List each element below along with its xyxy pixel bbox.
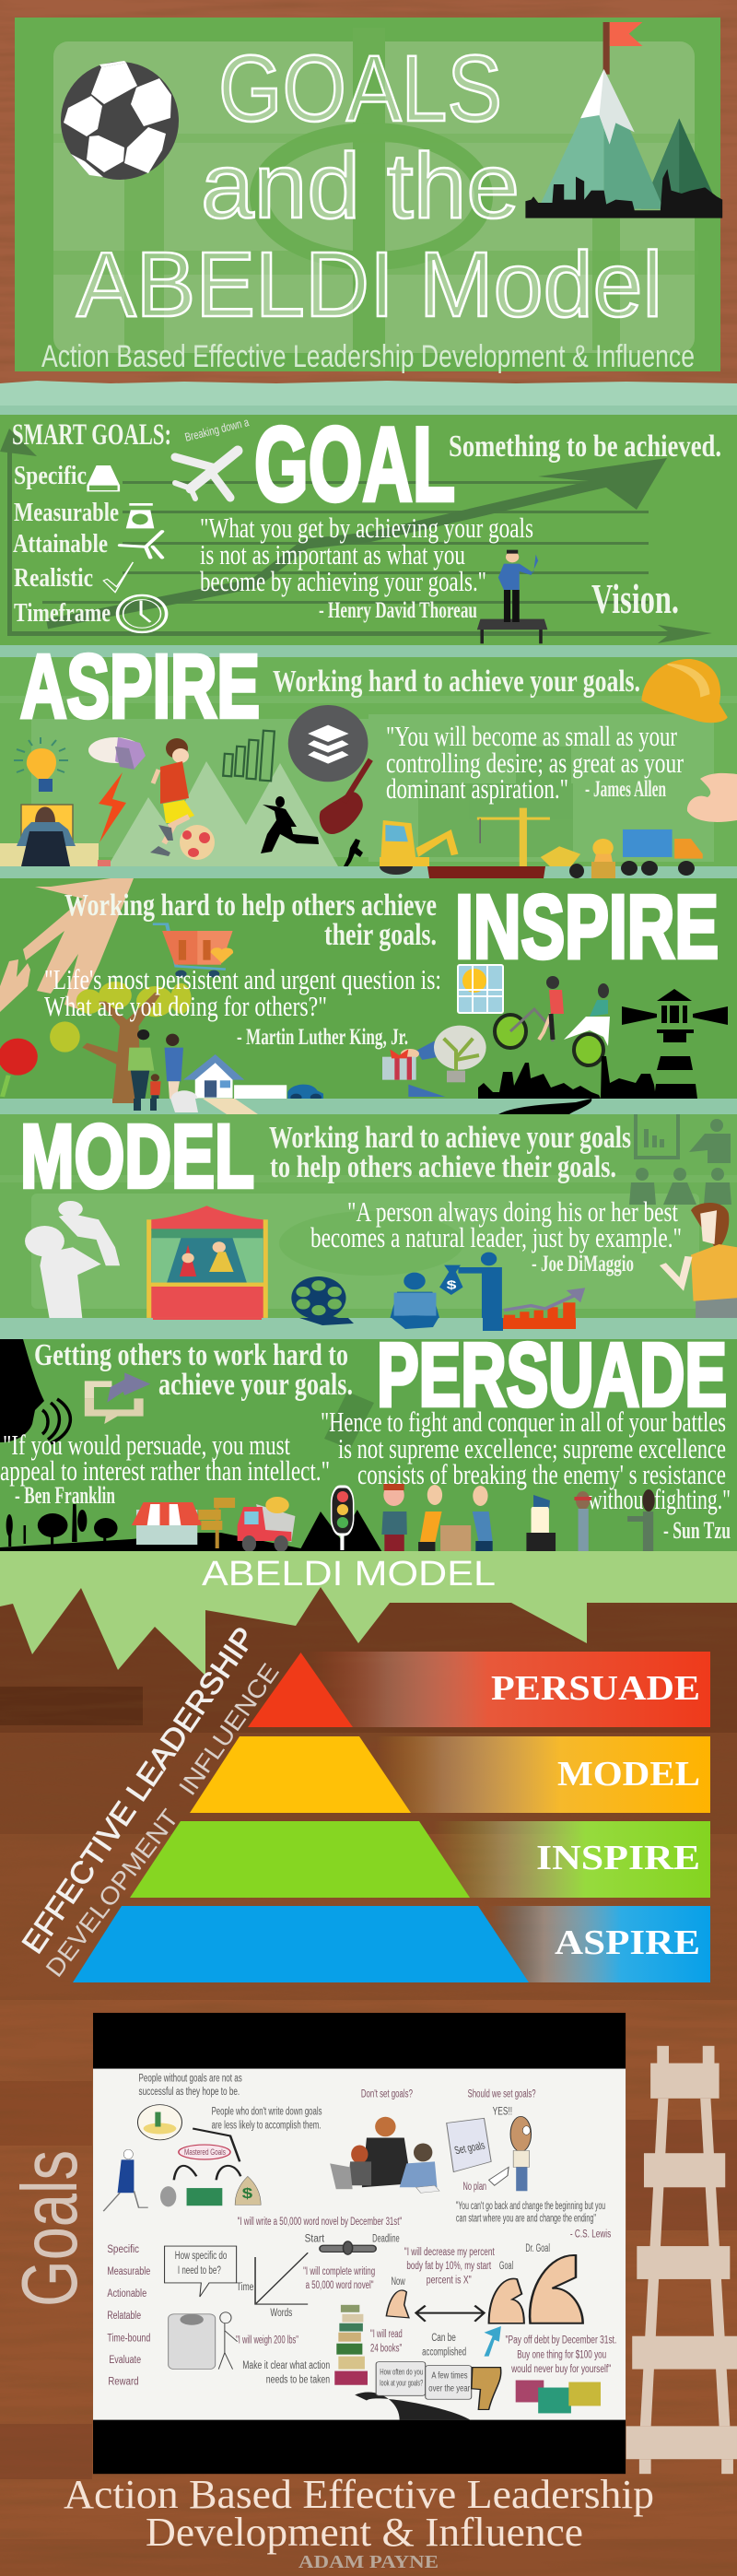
heading: MODEL: MODEL bbox=[20, 1106, 254, 1206]
pyramid tier: red bbox=[248, 1653, 353, 1727]
quote: James Allen: - James Allen bbox=[585, 777, 666, 802]
icon: soccer ball bbox=[61, 61, 179, 180]
whiteboard text: People without goals are not as bbox=[139, 2072, 242, 2084]
whiteboard text: "I will decrease my percent bbox=[404, 2246, 495, 2258]
whiteboard text: Words bbox=[270, 2306, 293, 2318]
quote: Ben Franklin: appeal to interest rather than intellect." bbox=[0, 1454, 330, 1487]
author credit: ADAM PAYNE bbox=[298, 2552, 439, 2572]
whiteboard text: Don't set goals? bbox=[361, 2088, 413, 2100]
faint building bbox=[418, 747, 573, 857]
icon: clock bbox=[118, 595, 167, 632]
quote: James Allen bbox=[386, 720, 684, 805]
icon: boy with soccer ball bbox=[150, 738, 215, 860]
vertical label: Goals: Goals bbox=[6, 2150, 94, 2307]
title text: and the: and the bbox=[201, 135, 520, 238]
trees bbox=[6, 1504, 189, 1548]
icon: window with sun bbox=[458, 965, 503, 1013]
icon: sound waves bbox=[42, 1399, 70, 1443]
quote: Thoreau: - Henry David Thoreau bbox=[319, 598, 477, 623]
sketch: road, speech bubbles and thumbs down: look at your goals? bbox=[380, 2380, 423, 2388]
icon: film reel bbox=[291, 1276, 353, 1324]
illustration: street scene bbox=[0, 1484, 655, 1552]
pyramid chart bbox=[73, 1652, 710, 1982]
whiteboard text: How specific do bbox=[175, 2250, 227, 2262]
sketch: bathroom scale and stick figure bbox=[169, 2312, 238, 2370]
label: Vision: Vision. bbox=[591, 575, 679, 622]
video panel: goals whiteboard bbox=[93, 2013, 626, 2474]
icon: gift and bulb bbox=[382, 1026, 486, 1097]
field pattern bbox=[0, 696, 737, 862]
whiteboard text: body fat by 10%, my start bbox=[406, 2260, 491, 2272]
icon: check mark bbox=[103, 562, 133, 593]
icon: shopping cart bbox=[153, 924, 233, 978]
quote: Ben Franklin: - Ben Franklin bbox=[15, 1482, 115, 1509]
icon: reaching hands bbox=[0, 878, 134, 1012]
illustration: parent and child silhouette bbox=[25, 1201, 120, 1318]
whiteboard text: I need to be? bbox=[178, 2264, 221, 2276]
soccer field pattern bbox=[53, 28, 698, 371]
panel: GOAL bbox=[0, 406, 737, 645]
whiteboard text: percent is X" bbox=[427, 2274, 472, 2286]
title text: GOALS: GOALS bbox=[218, 36, 502, 141]
icon: geometric brain bbox=[88, 737, 146, 770]
definition: Working hard to achieve your goals bbox=[269, 1121, 631, 1155]
whiteboard text: Measurable bbox=[107, 2265, 150, 2277]
quote: Thoreau bbox=[200, 512, 533, 623]
pyramid tier: green bbox=[130, 1821, 470, 1898]
teal divider bbox=[0, 1318, 737, 1339]
SMART list: Realistic bbox=[14, 564, 93, 593]
panel: INSPIRE bbox=[0, 876, 737, 1114]
illustration: puppet theater bbox=[146, 1206, 268, 1318]
whiteboard text: Start bbox=[305, 2232, 324, 2244]
icon: person with laptop and investor bbox=[390, 1253, 502, 1327]
icon: tandem bike bbox=[495, 976, 610, 1065]
footer title bbox=[64, 2472, 654, 2555]
quote: Joe DiMaggio bbox=[310, 1195, 682, 1276]
icon: hard hat bbox=[641, 659, 728, 723]
whiteboard text: Specific bbox=[107, 2243, 139, 2255]
quote: Martin Luther King: "Life's most persistent and urgent question is: bbox=[44, 963, 441, 995]
definition: achieve your goals. bbox=[158, 1368, 353, 1402]
panel: PERSUADE bbox=[0, 1324, 737, 1552]
sketch: goal arrows and money bbox=[160, 2129, 261, 2206]
quote: Martin Luther King: What are you doing for others?" bbox=[44, 990, 327, 1022]
label bar: inspire bbox=[433, 1821, 710, 1898]
footer title: Development & Influence bbox=[146, 2510, 583, 2555]
sketch: road, speech bubbles and thumbs down bbox=[355, 2362, 501, 2420]
footer title: Action Based Effective Leadership bbox=[64, 2472, 654, 2517]
icon: skyline bbox=[478, 1056, 656, 1099]
whiteboard text: "I will read bbox=[370, 2327, 403, 2340]
icon: running silhouette bbox=[261, 796, 319, 853]
label bar: inspire: INSPIRE bbox=[536, 1839, 700, 1877]
whiteboard text: successful as they hope to be. bbox=[139, 2085, 240, 2097]
label bar: model: MODEL bbox=[557, 1755, 700, 1794]
SMART list: Measurable bbox=[14, 499, 119, 527]
sketch: gift boxes bbox=[516, 2381, 601, 2413]
illustration: woman gesturing bbox=[662, 1203, 737, 1318]
whiteboard text: "I will write a 50,000 word novel by December 31st" bbox=[238, 2215, 402, 2228]
definition: their goals. bbox=[324, 918, 437, 952]
teal divider with ground objects bbox=[0, 857, 737, 878]
sketch: time-words chart bbox=[165, 2241, 376, 2304]
whiteboard text: 24 books" bbox=[370, 2342, 402, 2354]
whiteboard text: would never buy for yourself" bbox=[510, 2362, 611, 2374]
heading: ABELDI MODEL: ABELDI MODEL bbox=[202, 1555, 496, 1594]
label bar: model bbox=[376, 1736, 710, 1813]
icon: excavator and crane bbox=[380, 808, 703, 866]
label bar: aspire bbox=[488, 1906, 710, 1982]
dump truck bbox=[256, 1504, 295, 1542]
teal divider with road bbox=[0, 1099, 737, 1114]
pyramid tier: yellow bbox=[190, 1736, 411, 1813]
whiteboard text bbox=[107, 2072, 616, 2387]
whiteboard text: "Pay off debt by December 31st. bbox=[505, 2334, 616, 2346]
SMART list: Timeframe bbox=[14, 599, 111, 628]
definition bbox=[269, 1121, 631, 1184]
icon: gymnast bbox=[120, 532, 162, 558]
icon: flexed arm bbox=[687, 773, 737, 822]
quote: Thoreau: become by achieving your goals." bbox=[200, 565, 486, 597]
quote: Sun Tzu bbox=[321, 1406, 731, 1544]
label bar: persuade bbox=[306, 1652, 710, 1727]
whiteboard text: can start where you are and change the ending" bbox=[456, 2212, 596, 2224]
icon: growth chart bbox=[504, 1288, 585, 1327]
whiteboard text: Now bbox=[391, 2275, 405, 2288]
whiteboard text: "I will complete writing bbox=[303, 2265, 375, 2277]
whiteboard text: Evaluate bbox=[109, 2353, 141, 2365]
icon: light bulb bbox=[14, 737, 68, 792]
sketch: flexed arms and arrow bbox=[386, 2255, 583, 2357]
pyramid tier: blue bbox=[73, 1906, 529, 1982]
whiteboard text: a 50,000 word novel" bbox=[306, 2278, 374, 2291]
title text: ABELDI Model: ABELDI Model bbox=[76, 233, 662, 336]
quote: James Allen: dominant aspiration." bbox=[386, 772, 568, 805]
icon: lightning bolt bbox=[99, 772, 126, 842]
icon: person with laptop and investor: $ bbox=[447, 1278, 456, 1291]
label: Breaking down a: Breaking down a bbox=[183, 415, 251, 444]
sketch: stressed business people bbox=[330, 2117, 439, 2193]
whiteboard text: Time-bound bbox=[107, 2332, 150, 2344]
rotated label: INFLUENCE: INFLUENCE bbox=[173, 1658, 285, 1800]
sketch: goal arrows and money: $ bbox=[242, 2184, 252, 2202]
SMART list bbox=[13, 462, 119, 628]
definition: to help others achieve their goals. bbox=[270, 1150, 616, 1184]
icon: lighthouse bbox=[622, 989, 728, 1099]
icon: man on table bbox=[477, 550, 547, 643]
icon: flask bbox=[87, 465, 120, 491]
whiteboard text: Buy one thing for $100 you bbox=[517, 2348, 606, 2360]
whiteboard text: Make it clear what action bbox=[242, 2358, 330, 2370]
sketch: road, speech bubbles and thumbs down: over the year bbox=[428, 2382, 470, 2394]
whiteboard text: accomplished bbox=[422, 2346, 466, 2358]
heading: SMART GOALS: SMART GOALS: bbox=[12, 418, 171, 452]
label bar: aspire: ASPIRE bbox=[555, 1923, 700, 1962]
sketch: set goals note and thinking man: Set goals bbox=[453, 2139, 486, 2157]
whiteboard text: are less likely to accomplish them. bbox=[212, 2119, 321, 2131]
icon: speaking head silhouette bbox=[0, 1339, 44, 1442]
whiteboard text: "I will weigh 200 lbs" bbox=[236, 2334, 298, 2346]
icon: scale bbox=[126, 503, 154, 528]
teal divider bbox=[0, 645, 737, 657]
panel: ABELDI header with jagged edge bbox=[0, 1551, 737, 1676]
quote: Ben Franklin: "If you would persuade, you must bbox=[3, 1429, 290, 1461]
quote: Martin Luther King bbox=[44, 963, 441, 1050]
black ground and peaks bbox=[0, 1510, 381, 1551]
icon: airplane bbox=[175, 451, 238, 499]
whiteboard text: Relatable bbox=[107, 2310, 141, 2322]
panel: ASPIRE bbox=[0, 636, 737, 871]
icon: violin bbox=[320, 759, 373, 834]
panel: MODEL bbox=[0, 1106, 737, 1327]
icon: layers badge bbox=[288, 705, 368, 782]
definition: Working hard to help others achieve bbox=[64, 888, 437, 923]
whiteboard text: - C.S. Lewis bbox=[570, 2228, 611, 2240]
panel: title banner bbox=[15, 18, 722, 374]
rotated label: EFFECTIVE LEADERSHIP: EFFECTIVE LEADERSHIP bbox=[15, 1621, 262, 1959]
icon: ladder bbox=[626, 2046, 737, 2474]
sketch: runner with thought bubble bbox=[103, 2105, 181, 2211]
whiteboard text: Time bbox=[237, 2280, 254, 2293]
quote: Martin Luther King: - Martin Luther King, Jr. bbox=[237, 1025, 408, 1050]
icon: share arrow bbox=[85, 1372, 150, 1424]
sketch: road, speech bubbles and thumbs down: How often do you bbox=[380, 2369, 423, 2377]
rotated label: DEVELOPMENT: DEVELOPMENT bbox=[41, 1805, 184, 1982]
whiteboard text: Can be bbox=[431, 2331, 456, 2344]
definition bbox=[34, 1338, 353, 1402]
icon: mountain with flag and skyline bbox=[525, 22, 722, 218]
sketch: road, speech bubbles and thumbs down: A few times bbox=[431, 2370, 468, 2381]
whiteboard text: Actionable bbox=[107, 2288, 146, 2300]
quote: Thoreau: "What you get by achieving your goals bbox=[200, 512, 533, 544]
whiteboard text: People who don't write down goals bbox=[212, 2105, 322, 2117]
shop bbox=[136, 1510, 197, 1545]
sketch: goal arrows and money: Mastered Goals bbox=[184, 2148, 226, 2158]
sketch: stack of books bbox=[334, 2305, 368, 2385]
sketch: set goals note and thinking man bbox=[447, 2116, 532, 2191]
definition bbox=[64, 888, 437, 952]
icon: outlined bars bbox=[223, 731, 275, 781]
quote: Joe DiMaggio: - Joe DiMaggio bbox=[532, 1252, 634, 1276]
illustration group: aspire scene bbox=[0, 731, 737, 871]
icon: small runner bbox=[343, 839, 363, 871]
whiteboard text: YES!! bbox=[493, 2105, 512, 2117]
pale mountains bbox=[108, 761, 338, 866]
icon: red rose bbox=[0, 1039, 38, 1097]
quote: Thoreau: is not as important as what you bbox=[200, 538, 465, 570]
ghost icons: presentation and audience bbox=[629, 1114, 731, 1205]
field pattern bbox=[0, 1175, 737, 1309]
whiteboard text: Goal bbox=[499, 2260, 513, 2272]
teal strip bbox=[0, 381, 737, 415]
traffic light bbox=[340, 1532, 344, 1550]
whiteboard text: Reward bbox=[108, 2375, 139, 2387]
icon: ghost phone bbox=[324, 1392, 374, 1449]
definition: Getting others to work hard to bbox=[34, 1338, 348, 1372]
signpost bbox=[216, 1502, 219, 1548]
whiteboard text: Deadline bbox=[372, 2232, 400, 2244]
growth chart bbox=[0, 429, 712, 643]
icon: woman at desk bbox=[0, 805, 111, 867]
quote: Ben Franklin bbox=[0, 1429, 330, 1509]
whiteboard text: No plan bbox=[463, 2181, 486, 2193]
heading: GOAL: GOAL bbox=[254, 406, 455, 523]
label bar: persuade: PERSUADE bbox=[491, 1669, 700, 1708]
icon: family scene bbox=[50, 982, 323, 1114]
SMART list: Specific bbox=[14, 462, 87, 490]
whiteboard text: Dr. Goal bbox=[525, 2242, 550, 2254]
SMART list: Attainable bbox=[13, 530, 108, 559]
whiteboard text: needs to be taken bbox=[266, 2373, 330, 2385]
people bbox=[381, 1484, 655, 1551]
heading: ASPIRE: ASPIRE bbox=[20, 636, 260, 736]
whiteboard text: Should we set goals? bbox=[468, 2088, 536, 2100]
